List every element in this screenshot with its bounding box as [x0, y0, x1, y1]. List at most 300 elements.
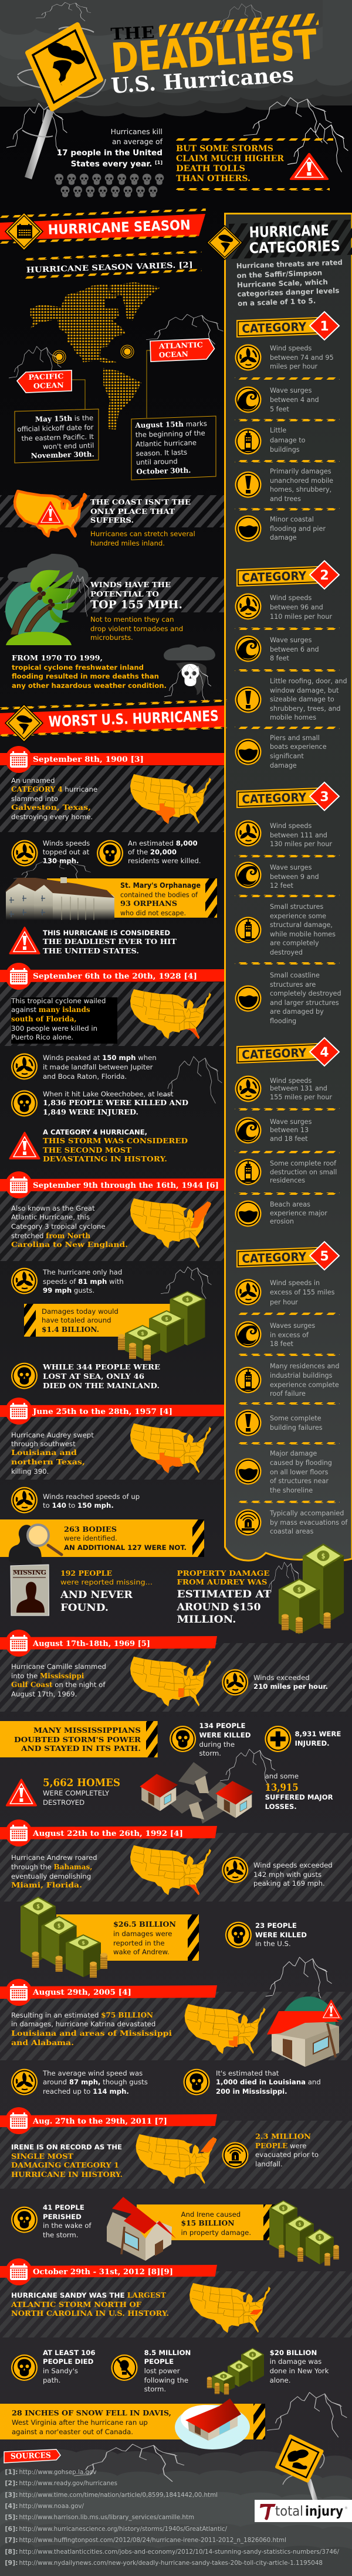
date bar: August 29th, 2005 [4] — [32, 1988, 131, 1997]
St. Mary's Orphanage box: who did not escape. — [120, 909, 186, 917]
deaths stat — [97, 839, 201, 866]
wind stat: 130 mph. — [43, 857, 79, 865]
deaths stat: It's estimated that — [216, 2069, 279, 2077]
St. Mary's Orphanage box: contained the bodies of — [120, 891, 198, 899]
sources tag — [4, 2449, 60, 2463]
hurricane: Galveston 1900: An unnamed — [11, 776, 55, 785]
deaths stat: DIED ON THE MAINLAND. — [43, 1382, 160, 1390]
date bar — [0, 2107, 217, 2134]
category 5: per hour — [270, 1299, 298, 1306]
category 2: mobile homes — [270, 714, 316, 721]
hurricane: Sandy 2012 — [0, 2258, 352, 2394]
category 5: by mass evacuations of — [270, 1519, 348, 1526]
hurricane: Andrew 1992: Hurricane Andrew roared — [11, 1853, 97, 1862]
tag: Pacific Ocean: PACIFIC — [28, 372, 64, 381]
category 1: between 4 and — [270, 396, 319, 404]
date bar: October 29th - 31st, 2012 [8][9] — [33, 2268, 173, 2277]
tag: Atlantic Ocean: OCEAN — [159, 350, 188, 359]
hurricane: Irene 2011: SINGLE MOST — [11, 2152, 73, 2161]
date bar — [0, 1630, 217, 1657]
lightning bolts at top — [6, 2, 348, 172]
box: May 15th: May 15th is the — [35, 414, 93, 424]
wind stat: it made landfall between Jupiter — [43, 1063, 153, 1071]
wind stat — [11, 1268, 124, 1294]
hurricane: Andrew 1992: eventually demolishing — [11, 1872, 91, 1880]
box: August 15th: until around — [136, 457, 178, 466]
wind stat: around 87 mph, though gusts — [43, 2078, 148, 2086]
section: winds top 155 mph: POTENTIAL TO — [90, 590, 159, 598]
map: New England — [136, 2134, 217, 2184]
hurricane: Andrew 1992: Miami, Florida. — [11, 1881, 82, 1889]
hurricane: Audrey 1957: Louisiana and — [11, 1449, 77, 1457]
major losses stat: and some — [265, 1772, 299, 1780]
title: The Deadliest U.S. Hurricanes: THE — [110, 23, 155, 44]
deaths stat — [225, 1921, 307, 1948]
illustration: damaged house — [107, 2197, 176, 2261]
logo: total injury: ® — [344, 2506, 348, 2510]
damages box with money: $26.5 BILLION — [113, 1920, 176, 1928]
section: the coast isn't the only place: hundred miles inland. — [90, 539, 165, 547]
categories header: HURRICANE — [249, 222, 329, 241]
sources list: http://www.hurricanescience.org/history/storms/1940s/GreatAtlantic/ — [19, 2525, 227, 2533]
heading: hurricane season varies: HURRICANE SEASON VARIES. [2] — [26, 261, 193, 275]
category 1: damage — [270, 534, 297, 541]
categories intro text — [236, 258, 344, 308]
evacuation stat: 2.3 MILLION — [255, 2132, 311, 2141]
deaths stat: WHILE 344 PEOPLE WERE — [42, 1363, 160, 1371]
homes destroyed — [6, 1777, 120, 1807]
category 3: while mobile homes — [270, 931, 336, 938]
bottom storm clouds — [0, 2449, 352, 2576]
hurricane: Great Atlantic 1944: Also known as the Great — [11, 1204, 95, 1212]
deaths stat — [170, 1722, 251, 1757]
category 3: 3 — [320, 790, 329, 805]
category 4: between 131 and — [270, 1085, 327, 1092]
sources list: [2]: — [5, 2479, 18, 2487]
category 5: excess of 155 miles — [270, 1289, 335, 1296]
property damage text: MILLION. — [177, 1614, 236, 1626]
sources list: http://www.noaa.gov/ — [19, 2502, 84, 2510]
wind stat: and Boca Raton, Florida. — [43, 1072, 127, 1081]
deaths stat: PEOPLE DIED — [43, 2357, 94, 2366]
category 2: Piers and small — [270, 734, 320, 742]
category 1: Wave surges — [270, 387, 312, 394]
snow callout: 28 INCHES OF SNOW FELL IN DAVIS, — [12, 2409, 171, 2417]
box: August 15th: October 30th. — [136, 466, 191, 476]
bottom road sign — [277, 2436, 324, 2502]
title: The Deadliest U.S. Hurricanes: U.S. Hurricanes — [110, 62, 295, 98]
category 4: Wind speeds — [270, 1077, 312, 1085]
callout: but some storms: DEATH TOLLS — [176, 164, 245, 173]
box: many Mississippians: AND STAYED IN ITS PATH. — [21, 1744, 141, 1753]
intro: average death toll: 17 people in the United — [57, 148, 163, 158]
wind stat: topped out at — [43, 848, 90, 856]
category 5: roof failure — [270, 1390, 306, 1398]
hurricane: Katrina 2005: in damages, hurricane Katrina devastated — [11, 2020, 155, 2028]
box: August 15th: Atlantic hurricane — [136, 438, 197, 448]
hurricane: Camille 1969: Gulf Coast on the night of — [11, 1681, 106, 1689]
bodies box: 263 BODIES — [64, 1525, 117, 1534]
hurricane: Sandy 2012: HURRICANE SANDY WAS THE LARGEST — [11, 2291, 166, 2299]
wind stat: speeds of 81 mph with — [43, 1277, 124, 1286]
deaths stat: path. — [43, 2376, 60, 2384]
heading: hurricane season varies — [22, 251, 202, 279]
wind stat: The hurricane only had — [42, 1268, 122, 1276]
banner: worst U.S. hurricanes — [0, 699, 227, 742]
title: The Deadliest U.S. Hurricanes — [109, 13, 319, 98]
callout: deadliest ever: THE UNITED STATES. — [43, 947, 139, 955]
category 5: Typically accompanied — [269, 1510, 344, 1517]
deaths stat: during the — [199, 1740, 235, 1749]
category 2: 110 miles per hour — [270, 613, 332, 621]
category 5: the shoreline — [270, 1487, 313, 1494]
sources list: [1]: — [5, 2468, 18, 2476]
evacuation stat — [222, 2132, 319, 2168]
wind stat: peaking at 169 mph. — [253, 1879, 325, 1887]
icon: skull tornado — [164, 645, 215, 703]
date bar — [0, 746, 224, 773]
intro: average death toll: States every year. — [71, 159, 152, 169]
category 2: damage — [270, 762, 297, 769]
hurricane: Audrey 1957: northern Texas, — [11, 1458, 85, 1466]
evacuation stat: evacuated prior to — [255, 2151, 319, 2159]
category 1: Wind speeds — [270, 345, 312, 352]
damage stat with money: alone. — [270, 2376, 290, 2384]
damage stat with money: done in New York — [270, 2367, 329, 2375]
missing text: FOUND. — [60, 1602, 109, 1614]
wind stat: Winds peaked at 150 mph when — [43, 1054, 157, 1062]
hurricane: Galveston 1900: Galveston, Texas, — [11, 803, 91, 812]
section: the coast isn't the only place — [0, 491, 224, 547]
hurricane: Andrew 1992: through the Bahamas, — [11, 1863, 92, 1871]
wind stat: Winds speeds — [43, 839, 90, 847]
property damage box with money: $15 BILLION — [181, 2219, 235, 2227]
category 3: are damaged by — [270, 1008, 324, 1016]
damage stat with money: in damage was — [270, 2357, 321, 2366]
category 3: Wind speeds — [270, 822, 312, 830]
category 2: Little roofing, door, and — [270, 677, 347, 685]
wind stat — [222, 1856, 333, 1887]
homes destroyed: WERE COMPLETELY — [43, 1789, 110, 1797]
section: freshwater flooding — [12, 645, 215, 703]
evacuation stat: PEOPLE were — [255, 2142, 306, 2150]
category 2: between 6 and — [270, 646, 319, 653]
wind stat: Wind speeds exceeded — [253, 1861, 333, 1869]
bodies box: AN ADDITIONAL 127 WERE NOT. — [64, 1543, 187, 1552]
sources list — [5, 2468, 339, 2567]
wind stat: 142 mph with gusts — [253, 1870, 321, 1879]
power outage stat — [111, 2349, 191, 2393]
missing poster — [11, 1565, 49, 1616]
bodies box — [0, 1519, 204, 1564]
callout: second most devastating: DEVASTATING IN HISTORY. — [43, 1155, 167, 1163]
deaths stat: 1,000 died in Louisiana and — [216, 2078, 321, 2086]
category 3: experience some — [270, 912, 326, 920]
category 3: structures are — [270, 981, 316, 989]
intro: average death toll: Hurricanes kill — [111, 127, 163, 136]
ocean markers — [53, 345, 134, 363]
hurricane: Galveston 1900 — [0, 746, 224, 955]
category 4: erosion — [270, 1218, 294, 1225]
category 4: Wave surges — [270, 1118, 312, 1126]
property damage text — [176, 1569, 272, 1626]
power outage stat: storm. — [144, 2385, 166, 2393]
category 1: CATEGORY — [242, 319, 307, 336]
box: many Mississippians: MANY MISSISSIPPIANS — [33, 1726, 141, 1735]
date bar — [0, 1171, 224, 1198]
hurricane: Florida 1928: south of Florida, — [11, 1015, 77, 1023]
missing text — [60, 1569, 153, 1614]
bodies box: were identified. — [64, 1534, 117, 1542]
tag: Pacific Ocean: OCEAN — [33, 381, 64, 390]
snow callout: West Virginia after the hurricane ran up — [12, 2418, 148, 2427]
hurricane: Audrey 1957: Hurricane Audrey swept — [11, 1431, 94, 1439]
sources list: http://www.gohsep.la.gov — [19, 2468, 97, 2476]
hurricane: Audrey 1957: killing 390. — [11, 1467, 49, 1476]
wind stat: 99 mph gusts. — [43, 1286, 94, 1294]
power outage stat: following the — [144, 2376, 188, 2384]
hurricane: Camille 1969: into the Mississippi — [11, 1672, 84, 1680]
date bar: September 8th, 1900 [3] — [33, 755, 144, 764]
categories intro text: on the Saffir/Simpson — [236, 268, 322, 280]
sources list: [9]: — [5, 2559, 18, 2567]
wind stat — [222, 1669, 328, 1696]
hurricane: Sandy 2012: NORTH CAROLINA IN U.S. HISTORY. — [11, 2309, 169, 2318]
category 1: miles per hour — [270, 363, 318, 370]
sources list: [7]: — [5, 2536, 18, 2544]
major losses stat — [265, 1772, 333, 1811]
map: Louisiana and Mississippi — [185, 2004, 266, 2054]
hurricane: Florida 1928: Puerto Rico alone. — [11, 1033, 73, 1041]
logo: total injury: injury — [305, 2504, 343, 2519]
category 3: CATEGORY — [242, 790, 307, 806]
category 3: Wave surges — [270, 864, 312, 871]
deaths stat: 1,836 PEOPLE WERE KILLED AND — [43, 1099, 188, 1107]
category 3: Small structures — [270, 903, 323, 911]
section: winds top 155 mph: Not to mention they can — [90, 615, 174, 623]
deaths stat: When it hit Lake Okeechobee, at least — [43, 1090, 174, 1098]
icon: USA with warning — [15, 491, 86, 536]
category 3: 12 feet — [270, 882, 293, 890]
major losses stat: 13,915 — [265, 1782, 299, 1794]
hurricane: Camille 1969 — [0, 1630, 352, 1824]
missing text: 192 PEOPLE — [60, 1569, 112, 1577]
categories intro text: Hurricane Scale, which — [237, 278, 328, 289]
sources tag: SOURCES — [11, 2451, 51, 2461]
section: winds top 155 mph: drop violent tornadoes and — [90, 625, 183, 633]
category 2: shrubbery, trees, and — [270, 705, 341, 713]
category 5 — [235, 1242, 348, 1535]
categories intro text: categorizes danger levels — [237, 287, 340, 298]
deaths stat: AT LEAST 106 — [43, 2349, 96, 2357]
injuries stat: INJURED. — [295, 1739, 330, 1747]
property damage text: FROM AUDREY WAS — [177, 1578, 268, 1586]
section: winds top 155 mph — [0, 554, 224, 645]
St. Mary's Orphanage box: 93 ORPHANS — [120, 899, 177, 908]
deaths stat: in the wake of — [43, 2221, 92, 2230]
category 1: between 74 and 95 — [270, 354, 334, 362]
date bar — [0, 2258, 217, 2285]
deaths stat: the storm. — [43, 2231, 78, 2239]
section: freshwater flooding: flooding resulted in more deaths than — [12, 672, 159, 680]
St. Mary's Orphanage box: St. Mary's Orphanage — [120, 881, 201, 890]
category 3: structural damage, — [270, 921, 333, 929]
connector lines — [72, 350, 150, 418]
map: North Carolina — [189, 2283, 270, 2333]
evacuation stat: landfall. — [255, 2160, 283, 2168]
St. Mary's Orphanage box — [5, 877, 217, 920]
power outage stat: lost power — [144, 2367, 180, 2375]
deaths stat: PERISHED — [43, 2213, 82, 2221]
illustration: destroyed houses — [140, 1762, 253, 1824]
category 5: Major damage — [270, 1450, 317, 1457]
lightning at bottom — [74, 2393, 347, 2482]
section: the coast isn't the only place: SUFFERS. — [90, 516, 134, 524]
callout: second most devastating — [10, 1128, 188, 1163]
deaths stat: storm. — [199, 1749, 221, 1757]
intro: average death toll — [57, 127, 163, 169]
damages box with money: in damages were — [113, 1930, 172, 1938]
sources list: http://www.harrison.lib.ms.us/library_services/camille.htm — [19, 2513, 194, 2521]
section: the coast isn't the only place: THE COAST ISN'T THE — [90, 498, 191, 506]
category 2: between 96 and — [270, 604, 323, 611]
callout: second most devastating: THE SECOND MOST — [43, 1146, 131, 1154]
hurricane: Irene 2011 — [0, 2107, 352, 2266]
dot map of the Americas — [31, 282, 161, 430]
power outage stat: 8.5 MILLION — [144, 2349, 191, 2357]
box: many Mississippians — [0, 1721, 158, 1757]
hurricane: Sandy 2012: ATLANTIC STORM NORTH OF — [11, 2301, 142, 2309]
date bar: September 9th through the 16th, 1944 [6] — [33, 1181, 219, 1190]
wind stat: reached up to 114 mph. — [43, 2087, 129, 2095]
box: August 15th: season. It lasts — [136, 448, 187, 458]
hurricane: Great Atlantic 1944: stretched from North — [11, 1232, 90, 1240]
tag: Atlantic Ocean: ATLANTIC — [158, 340, 203, 350]
category 3: flooding — [270, 1017, 296, 1025]
date bar: Aug. 27th to the 29th, 2011 [7] — [32, 2117, 167, 2126]
banner: worst U.S. hurricanes: WORST U.S. HURRICANES — [48, 707, 219, 730]
illustration: damaged house — [267, 1996, 341, 2067]
hurricane: Irene 2011: HURRICANE IN HISTORY. — [11, 2170, 123, 2179]
hurricane: Florida 1928: against many islands — [11, 1006, 90, 1014]
category 5: Some complete — [270, 1415, 321, 1422]
snow callout: against a nor'easter out of Canada. — [12, 2428, 133, 2436]
categories header: CATEGORIES — [249, 237, 340, 257]
callout: deadliest ever: THE DEADLIEST EVER TO HIT — [43, 938, 177, 946]
deaths stat: 1,849 WERE INJURED. — [43, 1108, 138, 1116]
section: freshwater flooding: tropical cyclone freshwater inland — [12, 663, 144, 672]
callout: deadliest ever: THIS HURRICANE IS CONSIDERED — [43, 929, 170, 937]
missing text: were reported missing... — [60, 1578, 153, 1586]
property damage box with money: And Irene caused — [181, 2210, 241, 2219]
category 5: CATEGORY — [242, 1249, 307, 1266]
tag: Atlantic Ocean — [150, 339, 215, 362]
hurricane: Great Atlantic 1944 — [0, 1171, 224, 1390]
deaths stat — [11, 1090, 188, 1117]
category 5: 5 — [320, 1249, 329, 1264]
category 4: CATEGORY — [242, 1045, 307, 1062]
banner: hurricane season: HURRICANE SEASON — [48, 218, 191, 238]
category 1: buildings — [270, 446, 300, 454]
category 2: Wave surges — [270, 636, 312, 644]
hurricane: Galveston 1900: destroying every home. — [11, 813, 93, 821]
hurricane: Camille 1969: August 17th, 1969. — [11, 1690, 77, 1698]
box: May 15th: official kickoff date for — [17, 423, 94, 433]
callout: deadliest ever — [10, 928, 177, 955]
property damage box with money — [107, 2197, 339, 2266]
date bar — [0, 1819, 217, 1846]
hurricane: Irene 2011: IRENE IS ON RECORD AS THE — [11, 2143, 122, 2151]
category 3: completely destroyed — [270, 990, 341, 997]
sources list: [4]: — [5, 2502, 18, 2510]
injuries stat — [265, 1726, 341, 1752]
hurricane: Katrina 2005 — [0, 1979, 352, 2095]
date bar — [0, 1398, 224, 1425]
damages box with money: Damages today would — [42, 1307, 119, 1316]
road sign: hurricane warning — [18, 25, 106, 179]
category 4: residences — [270, 1177, 305, 1184]
property damage text: AROUND $150 — [176, 1602, 261, 1613]
wind stat — [12, 839, 90, 866]
deaths stat: residents were killed. — [128, 857, 201, 865]
damage stat with money — [207, 2348, 329, 2394]
hurricane: Florida 1928 — [0, 963, 224, 1163]
category 4: Beach areas — [270, 1201, 310, 1208]
box: May 15th: the eastern Pacific. It — [21, 432, 94, 442]
section: freshwater flooding: FROM 1970 TO 1999, — [12, 654, 103, 662]
homes destroyed: 5,662 HOMES — [43, 1777, 120, 1789]
intro: average death toll: [1] — [155, 160, 163, 165]
illustration: orphanage — [5, 877, 114, 920]
category 5: Waves surges — [270, 1322, 315, 1330]
sources list: [6]: — [5, 2525, 18, 2533]
deaths stat: in the U.S. — [255, 1940, 291, 1948]
tag: Pacific Ocean — [17, 370, 72, 393]
category 3: between 111 and — [270, 832, 327, 839]
sources list: [8]: — [5, 2548, 18, 2555]
category 5: experience complete — [270, 1381, 339, 1389]
damages box with money: $1.4 BILLION. — [42, 1326, 99, 1334]
category 2: window damage, but — [270, 687, 339, 694]
major losses stat: SUFFERED MAJOR — [265, 1793, 333, 1801]
section: the coast isn't the only place: Hurricanes can stretch several — [90, 530, 195, 538]
hurricane: Audrey 1957 — [0, 1398, 344, 1634]
callout: but some storms: THAN OTHERS. — [176, 174, 251, 183]
date bar — [0, 963, 224, 990]
property damage text: ESTIMATED AT — [177, 1589, 272, 1600]
wind stat — [11, 2069, 148, 2095]
logo: total injury — [255, 2500, 352, 2522]
banner: hurricane season — [0, 209, 206, 250]
wind stat — [11, 1054, 157, 1081]
section: winds top 155 mph: WINDS HAVE THE — [90, 581, 171, 589]
category 5: of structures near — [270, 1477, 329, 1485]
category 5: 18 feet — [270, 1340, 293, 1348]
category 2 — [235, 561, 347, 769]
map: Texas — [130, 774, 211, 824]
property damage box with money: in property damage. — [181, 2229, 251, 2237]
hurricane: Great Atlantic 1944: Category 3 tropical cyclone — [11, 1222, 106, 1231]
deaths stat: LOST AT SEA, ONLY 46 — [43, 1372, 144, 1381]
logo: total injury: total — [275, 2504, 303, 2519]
damage stat with money: $20 BILLION — [270, 2349, 317, 2357]
category 1: Little — [270, 427, 286, 434]
category 2: 2 — [320, 568, 329, 583]
map: Mississippi — [130, 1657, 211, 1706]
deaths stat: WERE KILLED — [199, 1731, 251, 1739]
damages box with money — [21, 1896, 199, 1978]
category 5: building failures — [270, 1424, 323, 1432]
